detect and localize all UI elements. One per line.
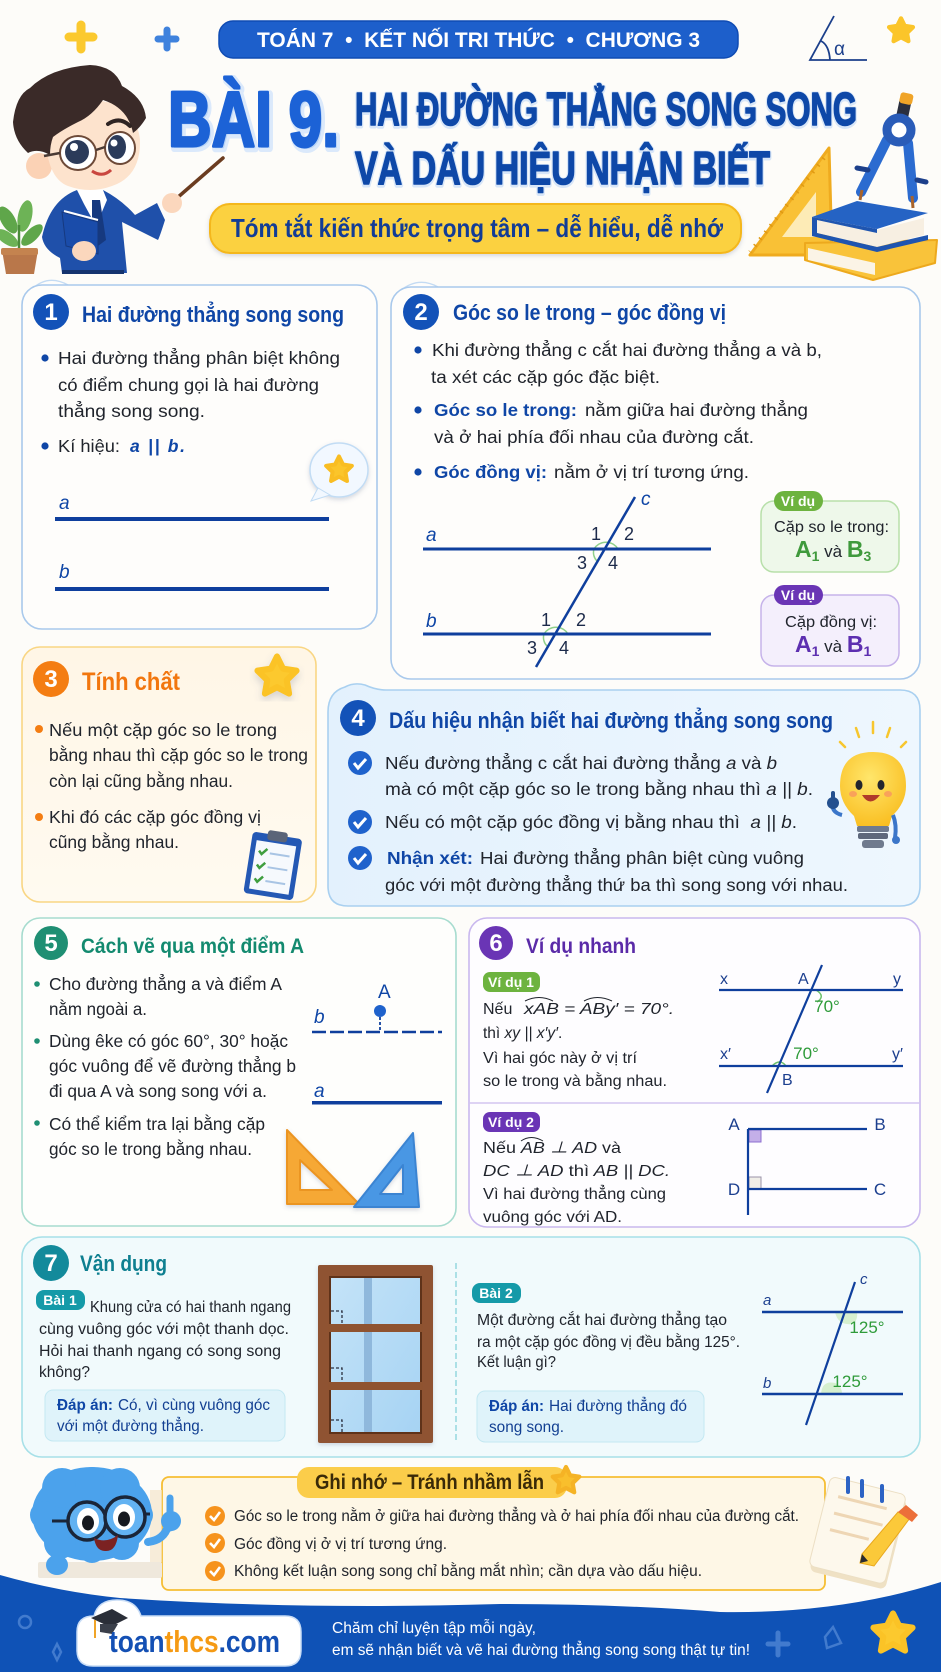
- drawing steps: Dùng êke có góc 60°, 30° hoặc: [49, 1031, 288, 1051]
- subtitle pill: [210, 204, 741, 253]
- example 1 text: thì xy || x′y′.: [483, 1025, 562, 1042]
- badge 4: [340, 700, 376, 736]
- parallel lines a and b: b: [59, 562, 70, 583]
- example card: corresponding: B: [847, 631, 863, 657]
- example 2 text: Nếu AB ⊥ AD và: [483, 1140, 621, 1157]
- answer 2: Hai đường thẳng đó: [549, 1397, 687, 1415]
- heading 2: Góc so le trong – góc đồng vị: [453, 300, 726, 325]
- badge 6: [479, 926, 513, 960]
- exercise 2 diagram: c: [860, 1271, 868, 1288]
- logo text: toanthcs.com: [109, 1624, 280, 1659]
- footer wave: [0, 1575, 941, 1672]
- drawing steps: nằm ngoài a.: [49, 998, 147, 1019]
- angle bullets: Góc so le trong:: [434, 400, 577, 420]
- angle bullets: nằm ở vị trí tương ứng.: [554, 461, 749, 482]
- course pill: TOÁN 7 • KẾT NỐI TRI THỨC • CHƯƠNG 3: [257, 28, 700, 52]
- construction diagram: A: [378, 982, 391, 1003]
- icon: star: [258, 656, 296, 694]
- exercise 1: Hỏi hai thanh ngang có song song: [39, 1343, 281, 1360]
- icon: graduation cap: [91, 1609, 128, 1638]
- icon: blue set square: [354, 1133, 419, 1207]
- badge 5: [34, 926, 68, 960]
- definition bullets: [41, 347, 340, 456]
- example 2 diagram: [728, 1115, 886, 1215]
- drawing steps: góc vuông để vẽ đường thẳng b: [49, 1055, 296, 1076]
- transversal diagram: a: [426, 525, 437, 546]
- drawing steps: [34, 973, 296, 1159]
- construction diagram: b: [314, 1007, 325, 1028]
- course pill: [219, 21, 738, 58]
- footer message: Chăm chỉ luyện tập mỗi ngày,: [332, 1620, 536, 1637]
- example 1 diagram: y: [893, 971, 901, 988]
- property bullets: còn lại cũng bằng nhau.: [49, 770, 233, 791]
- exercise 2: ra một cặp góc đồng vị đều bằng 125°.: [477, 1334, 740, 1351]
- exercise 2 diagram: 125°: [832, 1372, 868, 1391]
- example 1 text: [483, 972, 674, 1090]
- panel 4: recognition signs: [328, 684, 920, 906]
- icon: footer star: [874, 1614, 912, 1651]
- panel 1: parallel lines: [22, 280, 377, 629]
- check list: mà có một cặp góc so le trong bằng nhau thì a || b.: [385, 778, 813, 799]
- example card: alternate: 1: [812, 548, 820, 564]
- answer 1: Đáp án:: [57, 1397, 113, 1414]
- transversal diagram: b: [426, 611, 437, 632]
- exercise 2 diagram: b: [763, 1375, 771, 1392]
- example card: alternate: 3: [863, 548, 871, 564]
- panel 3: properties: [22, 647, 316, 902]
- footer message: em sẽ nhận biết và vẽ hai đường thẳng song song thật tự tin!: [332, 1641, 750, 1659]
- exercise 2 diagram: [762, 1271, 903, 1425]
- angle bullets: Khi đường thẳng c cắt hai đường thẳng a và b,: [432, 339, 822, 360]
- exercise 2 diagram: a: [763, 1292, 771, 1309]
- illustration: window: [318, 1265, 433, 1443]
- property bullets: Nếu một cặp góc so le trong: [49, 720, 277, 740]
- parallel lines a and b: a: [59, 493, 70, 514]
- example 2 diagram: D: [728, 1180, 740, 1199]
- heading 6: Ví dụ nhanh: [526, 935, 636, 958]
- title: BÀI 9.: BÀI 9.: [168, 75, 339, 163]
- illustration: books: [805, 201, 937, 280]
- badge 1: 1: [44, 299, 58, 326]
- check list: Nếu đường thẳng c cắt hai đường thẳng a và b: [385, 752, 777, 773]
- parallel lines a and b: [55, 493, 329, 591]
- example card: alternate: B: [847, 536, 863, 562]
- badge 2: [403, 294, 439, 330]
- property bullets: cũng bằng nhau.: [49, 831, 179, 852]
- definition bullets: a || b.: [130, 436, 185, 456]
- transversal diagram: 1: [541, 610, 551, 630]
- answer 2: song song.: [489, 1419, 564, 1436]
- check list: Nhận xét:: [387, 848, 473, 868]
- reminder heading: Ghi nhớ – Tránh nhầm lẫn: [315, 1470, 544, 1494]
- heading 3: Tính chất: [82, 668, 181, 696]
- example card: corresponding: 1: [863, 643, 871, 659]
- transversal diagram: 3: [527, 638, 537, 658]
- icon: speech bubble star: [310, 443, 368, 501]
- icon: angle alpha: α: [834, 39, 845, 60]
- example card: corresponding: Ví dụ: [781, 587, 815, 603]
- example card: alternate: [761, 491, 899, 572]
- example 1 diagram: B: [782, 1072, 793, 1089]
- drawing steps: Có thể kiểm tra lại bằng cặp: [49, 1113, 265, 1134]
- example 2 text: [483, 1112, 670, 1226]
- reminder list: [205, 1506, 799, 1581]
- transversal diagram: 4: [559, 638, 569, 658]
- example 2 diagram: C: [874, 1180, 886, 1199]
- check list: góc với một đường thẳng thứ ba thì song song với nhau.: [385, 874, 848, 895]
- heading 1: Hai đường thẳng song song: [82, 302, 344, 327]
- example card: alternate: Cặp so le trong:: [774, 519, 889, 536]
- illustration: plant: [0, 199, 46, 274]
- example card: alternate: và: [819, 542, 847, 561]
- example 2 diagram: A: [728, 1115, 740, 1134]
- footer logo: [77, 1600, 301, 1666]
- panel 2: alternate and corresponding angles: [391, 282, 920, 679]
- exercise 1: [36, 1290, 291, 1381]
- check list: Nếu có một cặp góc đồng vị bằng nhau thì a || b.: [385, 811, 797, 832]
- icon: corner star: [889, 18, 913, 41]
- example 1 diagram: A: [798, 971, 809, 988]
- heading 7: Vận dụng: [80, 1251, 167, 1276]
- angle bullets: ta xét các cặp góc đặc biệt.: [431, 367, 660, 387]
- definition bullets: Kí hiệu:: [58, 436, 120, 456]
- example 2 text: Ví dụ 2: [488, 1114, 534, 1130]
- title: lesson name: VÀ DẤU HIỆU NHẬN BIẾT: [355, 142, 770, 194]
- reminder panel: [162, 1467, 825, 1590]
- reminder list: Góc đồng vị ở vị trí tương ứng.: [234, 1536, 447, 1553]
- transversal diagram: 2: [576, 610, 586, 630]
- heading 4: Dấu hiệu nhận biết hai đường thẳng song song: [389, 708, 833, 733]
- example 2 text: DC ⊥ AD thì AB || DC.: [483, 1163, 670, 1180]
- badge 5: 5: [44, 930, 58, 957]
- exercise 1: không?: [39, 1364, 90, 1381]
- icon: clipboard: [243, 828, 303, 901]
- transversal diagram: 3: [577, 553, 587, 573]
- example 1 diagram: y′: [892, 1046, 903, 1063]
- answer 1: [45, 1390, 285, 1441]
- title: lesson name: [355, 83, 857, 195]
- construction diagram: [312, 982, 442, 1104]
- example 1 text: Ví dụ 1: [488, 974, 534, 990]
- panel 7: application: [22, 1237, 920, 1457]
- example card: corresponding: A: [795, 631, 812, 657]
- example card: corresponding: và: [819, 637, 847, 656]
- footer decorations: [19, 1616, 841, 1660]
- transversal diagram: [423, 489, 711, 667]
- example 1 diagram: x′: [720, 1046, 731, 1063]
- reminder list: Không kết luận song song chỉ bằng mắt nhìn; cần dựa vào dấu hiệu.: [234, 1563, 702, 1580]
- construction diagram: a: [314, 1081, 325, 1102]
- example card: alternate: Ví dụ: [781, 493, 815, 509]
- title: BÀI 9.: BÀI 9.: [170, 77, 341, 165]
- exercise 1: cùng vuông góc với một thanh dọc.: [39, 1321, 289, 1338]
- definition bullets: thẳng song song.: [58, 400, 205, 421]
- example 2 text: Vì hai đường thẳng cùng: [483, 1185, 666, 1203]
- answer 2: [477, 1391, 704, 1442]
- property bullets: Khi đó các cặp góc đồng vị: [49, 807, 261, 827]
- drawing steps: đi qua A và song song với a.: [49, 1081, 267, 1101]
- exercise 2 diagram: 125°: [849, 1318, 885, 1337]
- check list: Hai đường thẳng phân biệt cùng vuông: [480, 847, 804, 868]
- icon: angle alpha: [810, 16, 867, 60]
- reminder heading: [297, 1467, 579, 1498]
- reminder list: Góc so le trong nằm ở giữa hai đường thẳng và ở hai phía đối nhau của đường cắt.: [234, 1507, 799, 1525]
- header: [0, 16, 937, 280]
- drawing steps: Cho đường thẳng a và điểm A: [49, 973, 282, 994]
- exercise 1: Khung cửa có hai thanh ngang: [90, 1299, 291, 1316]
- definition bullets: có điểm chung gọi là hai đường: [58, 375, 319, 395]
- illustration: notepad and pencil: [807, 1476, 918, 1590]
- illustration: compass: [857, 92, 926, 208]
- example 1 diagram: 70°: [793, 1044, 819, 1063]
- icon: yellow plus: [69, 25, 93, 49]
- exercise 1: Bài 1: [43, 1292, 77, 1308]
- example 2 diagram: B: [874, 1115, 886, 1134]
- transversal diagram: 1: [591, 524, 601, 544]
- answer 1: Có, vì cùng vuông góc: [118, 1397, 270, 1414]
- property bullets: [35, 720, 308, 852]
- angle bullets: và ở hai phía đối nhau của đường cắt.: [434, 426, 754, 447]
- subtitle pill: Tóm tắt kiến thức trọng tâm – dễ hiểu, dễ nhớ: [231, 213, 723, 243]
- badge 3: [33, 661, 69, 697]
- badge 6: 6: [489, 930, 503, 957]
- example card: corresponding: [761, 585, 899, 666]
- badge 7: 7: [44, 1250, 58, 1277]
- transversal diagram: 4: [608, 553, 618, 573]
- answer 2: Đáp án:: [489, 1398, 544, 1415]
- exercise 2: Bài 2: [479, 1285, 513, 1301]
- example 1 text: xAB = ABy′ = 70°.: [523, 1001, 674, 1018]
- example 1 text: Vì hai góc này ở vị trí: [483, 1050, 638, 1067]
- example 1 text: so le trong và bằng nhau.: [483, 1073, 667, 1090]
- example card: corresponding: Cặp đồng vị:: [785, 614, 877, 631]
- badge 7: [33, 1245, 69, 1281]
- example 1 diagram: x: [720, 971, 728, 988]
- badge 4: 4: [351, 705, 365, 732]
- illustration: yellow set square: [750, 148, 832, 255]
- panel 6: quick examples: [469, 918, 920, 1227]
- example 1 diagram: 70°: [814, 997, 840, 1016]
- answer 1: với một đường thẳng.: [57, 1417, 204, 1435]
- example card: corresponding: 1: [812, 643, 820, 659]
- transversal diagram: 2: [624, 524, 634, 544]
- exercise 2: Một đường cắt hai đường thẳng tạo: [477, 1311, 727, 1329]
- angle bullets: Góc đồng vị:: [434, 462, 547, 482]
- transversal diagram: c: [641, 489, 651, 510]
- example card: alternate: A: [795, 536, 812, 562]
- property bullets: bằng nhau thì cặp góc so le trong: [49, 744, 308, 765]
- angle bullets: [414, 339, 822, 482]
- title: lesson name: VÀ DẤU HIỆU NHẬN BIẾT: [355, 143, 770, 195]
- example 1 diagram: [719, 965, 903, 1093]
- icon: orange set square: [287, 1130, 359, 1204]
- illustration: brain mascot: [30, 1467, 181, 1578]
- badge 3: 3: [44, 666, 58, 693]
- icon: light bulb mascot: [827, 722, 906, 848]
- angle bullets: nằm giữa hai đường thẳng: [585, 399, 808, 420]
- exercise 2: Kết luận gì?: [477, 1354, 556, 1371]
- example 1 text: Nếu: [483, 1001, 512, 1018]
- definition bullets: Hai đường thẳng phân biệt không: [58, 347, 340, 368]
- check list: [348, 751, 848, 895]
- heading 5: Cách vẽ qua một điểm A: [81, 935, 304, 958]
- icon: blue plus: [158, 30, 176, 48]
- footer message: [332, 1620, 750, 1659]
- example 2 text: vuông góc với AD.: [483, 1209, 622, 1226]
- drawing steps: góc so le trong bằng nhau.: [49, 1138, 252, 1159]
- badge 1: [33, 294, 69, 330]
- illustration: teacher: [13, 65, 223, 274]
- panel 5: drawing through a point: [22, 918, 456, 1226]
- badge 2: 2: [414, 299, 428, 326]
- exercise 2: [472, 1283, 740, 1371]
